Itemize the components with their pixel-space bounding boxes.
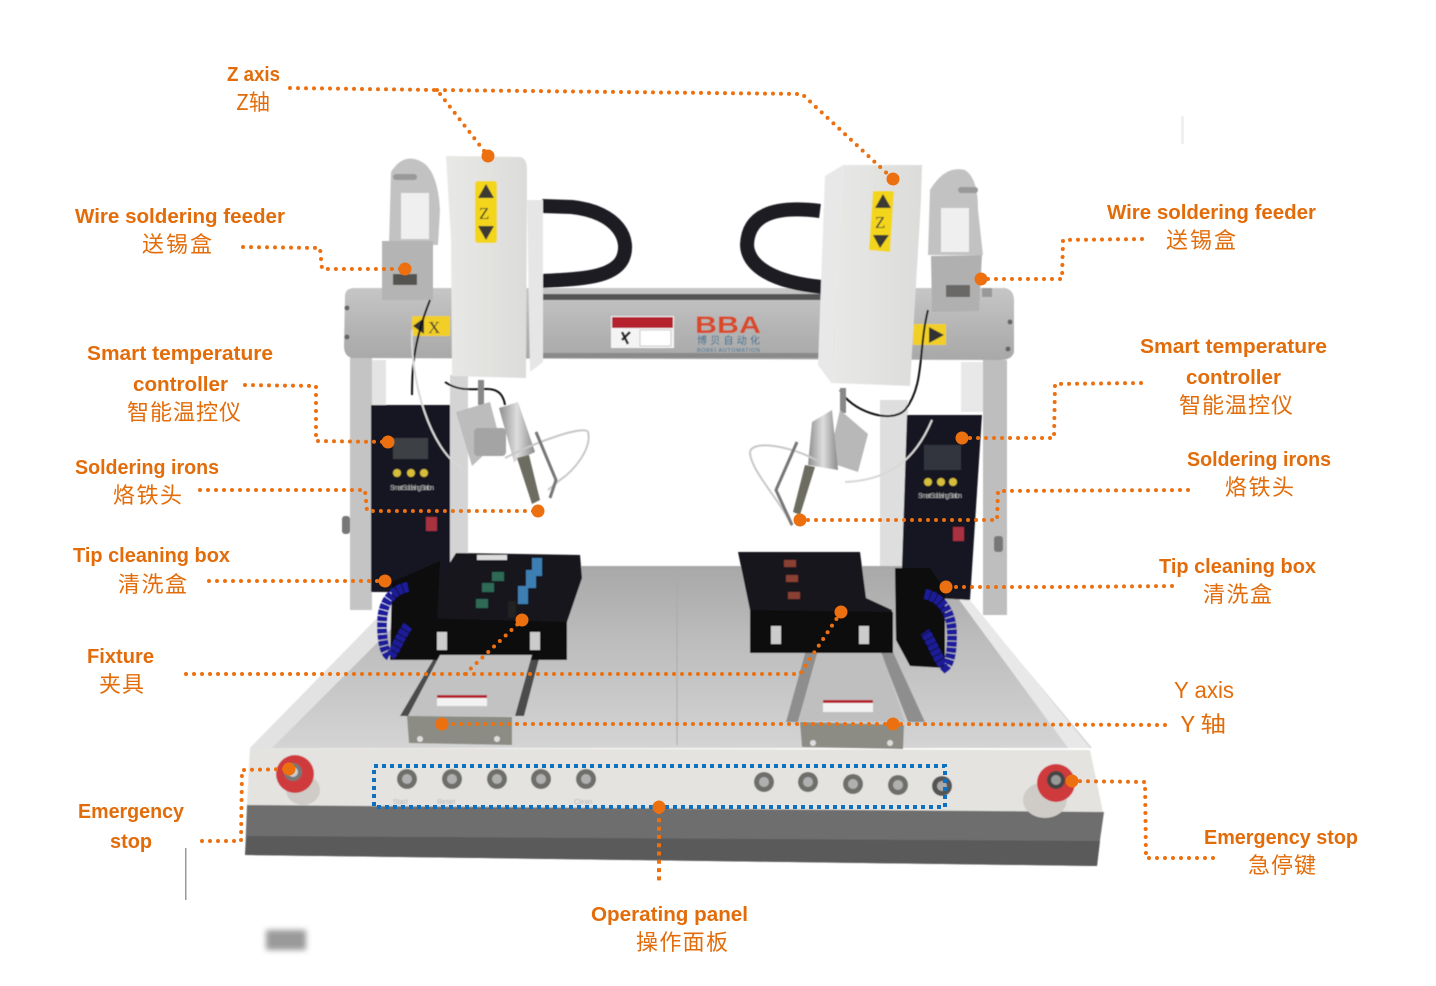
label: Y axis: Y 轴 bbox=[1180, 707, 1226, 739]
control box right: Smart Soldering Station bbox=[918, 493, 962, 500]
buttons right group bbox=[754, 772, 952, 796]
buttons left group bbox=[393, 769, 596, 806]
Y slide left bbox=[407, 655, 532, 745]
callout lines bbox=[186, 88, 1216, 884]
coolant hose right bbox=[925, 594, 952, 667]
label: tip cleaning box right: Tip cleaning box bbox=[1159, 556, 1316, 578]
drag chain right bbox=[747, 209, 822, 287]
label: soldering irons right: 烙铁头 bbox=[1225, 470, 1294, 502]
leader: tip cleaning left bbox=[209, 574, 392, 588]
label: smart temperature controller left: controller bbox=[133, 374, 228, 396]
BBA logo bbox=[695, 312, 761, 354]
warning label bbox=[611, 316, 674, 348]
buttons left group: Start bbox=[393, 799, 408, 806]
leader: wire feeder right bbox=[974, 239, 1142, 286]
Z carriage right: Z bbox=[875, 213, 885, 232]
label: soldering irons left: 烙铁头 bbox=[113, 478, 182, 510]
label: Z axis: Z轴 bbox=[236, 85, 270, 117]
Z carriage left bbox=[446, 156, 543, 378]
label: emergency stop left: stop bbox=[110, 831, 152, 853]
label: operating panel: Operating panel bbox=[591, 904, 748, 926]
label: smart temperature controller right: 智能温控仪 bbox=[1179, 388, 1293, 420]
label: fixture: Fixture bbox=[87, 646, 154, 668]
label: emergency stop right: 急停键 bbox=[1248, 848, 1316, 880]
leader: Y axis bbox=[436, 718, 1165, 730]
BBA logo: BOBEI AUTOMATION bbox=[697, 348, 760, 354]
label: smart temperature controller right bbox=[1140, 336, 1327, 420]
label: tip cleaning box left bbox=[73, 545, 230, 599]
label: wire soldering feeder left bbox=[75, 206, 285, 259]
label: smart temperature controller right: Smart temperature bbox=[1140, 336, 1327, 358]
label: smart temperature controller right: controller bbox=[1186, 367, 1281, 389]
leader: operating panel bbox=[652, 800, 666, 884]
fixture right bbox=[738, 552, 893, 653]
leader: Z axis bbox=[290, 88, 900, 186]
emergency stop left bbox=[276, 755, 320, 805]
label: wire soldering feeder left: 送锡盒 bbox=[142, 227, 212, 259]
wire feeder left bbox=[382, 159, 440, 300]
label: tip cleaning box left: Tip cleaning box bbox=[73, 545, 230, 567]
label: Y axis: Y axis bbox=[1174, 677, 1234, 703]
leader: fixture bbox=[186, 606, 848, 674]
leader: temperature controller right bbox=[956, 383, 1141, 444]
tip cleaning box right bbox=[895, 568, 945, 668]
label: fixture: 夹具 bbox=[99, 667, 144, 699]
label: Z axis bbox=[227, 64, 280, 117]
machine photo illustration bbox=[245, 156, 1104, 866]
label: wire soldering feeder left: Wire soldering feeder bbox=[75, 206, 285, 228]
label: soldering irons left bbox=[75, 457, 219, 510]
left column bbox=[342, 355, 468, 610]
Z carriage right bbox=[818, 165, 922, 386]
label: fixture bbox=[87, 646, 154, 699]
label: Y axis bbox=[1174, 677, 1234, 739]
table dark base bbox=[245, 805, 1104, 866]
table front panel bbox=[247, 748, 1103, 812]
label: soldering irons left: Soldering irons bbox=[75, 457, 219, 479]
label: emergency stop left: Emergency bbox=[78, 801, 185, 823]
control box left bbox=[371, 405, 450, 592]
label: soldering irons right: Soldering irons bbox=[1187, 449, 1331, 471]
label: wire soldering feeder right: Wire soldering feeder bbox=[1107, 202, 1316, 224]
label: smart temperature controller left: 智能温控仪 bbox=[127, 395, 241, 427]
label: emergency stop left bbox=[78, 801, 185, 853]
right column bbox=[880, 360, 1007, 615]
X axis sticker left bbox=[412, 316, 450, 337]
leader: wire feeder left bbox=[243, 247, 412, 276]
cables bbox=[412, 300, 932, 482]
wire feeder right bbox=[928, 169, 992, 312]
control box left: Smart Soldering Station bbox=[390, 485, 434, 492]
Y slide right bbox=[798, 654, 905, 749]
leader: soldering iron left bbox=[200, 490, 544, 518]
buttons left group: Reset bbox=[437, 799, 455, 806]
buttons left group: Clean bbox=[574, 799, 592, 806]
worktable top bbox=[250, 566, 1092, 748]
leader: soldering iron right bbox=[794, 490, 1188, 526]
X axis sticker left: X bbox=[428, 318, 440, 337]
label: smart temperature controller left bbox=[87, 343, 273, 427]
label: Z axis: Z axis bbox=[227, 64, 280, 86]
control box right bbox=[901, 415, 982, 600]
fixture left bbox=[415, 553, 582, 660]
photo residue smudge bbox=[185, 116, 1184, 950]
label: operating panel bbox=[591, 904, 748, 957]
tip cleaning box left bbox=[390, 561, 440, 660]
operating panel highlight box bbox=[374, 766, 945, 807]
coolant hose left bbox=[382, 587, 408, 656]
leader: emergency stop left bbox=[202, 762, 296, 841]
leader: temperature controller left bbox=[245, 385, 394, 448]
crossbeam bbox=[344, 288, 1014, 360]
X axis sticker right bbox=[913, 324, 946, 345]
drag chain left bbox=[542, 206, 625, 281]
label: operating panel: 操作面板 bbox=[636, 925, 728, 957]
label: wire soldering feeder right: 送锡盒 bbox=[1166, 223, 1236, 255]
emergency stop right bbox=[1023, 764, 1075, 818]
rails under fixtures bbox=[400, 650, 925, 722]
label: wire soldering feeder right bbox=[1107, 202, 1316, 255]
BBA logo: BBA bbox=[695, 312, 761, 339]
label: smart temperature controller left: Smart temperature bbox=[87, 343, 273, 365]
leader: tip cleaning right bbox=[940, 580, 1172, 594]
BBA logo: 博贝自动化 bbox=[697, 332, 760, 347]
label: emergency stop right bbox=[1204, 827, 1358, 880]
soldering head right bbox=[750, 388, 868, 526]
label: soldering irons right bbox=[1187, 449, 1331, 502]
label: tip cleaning box right bbox=[1159, 556, 1316, 609]
label: tip cleaning box left: 清洗盒 bbox=[118, 567, 187, 599]
leader: emergency stop right bbox=[1066, 774, 1216, 858]
soldering head left bbox=[456, 380, 589, 504]
Z carriage left: Z bbox=[479, 204, 489, 223]
label: emergency stop right: Emergency stop bbox=[1204, 827, 1358, 849]
label: tip cleaning box right: 清洗盒 bbox=[1203, 577, 1272, 609]
